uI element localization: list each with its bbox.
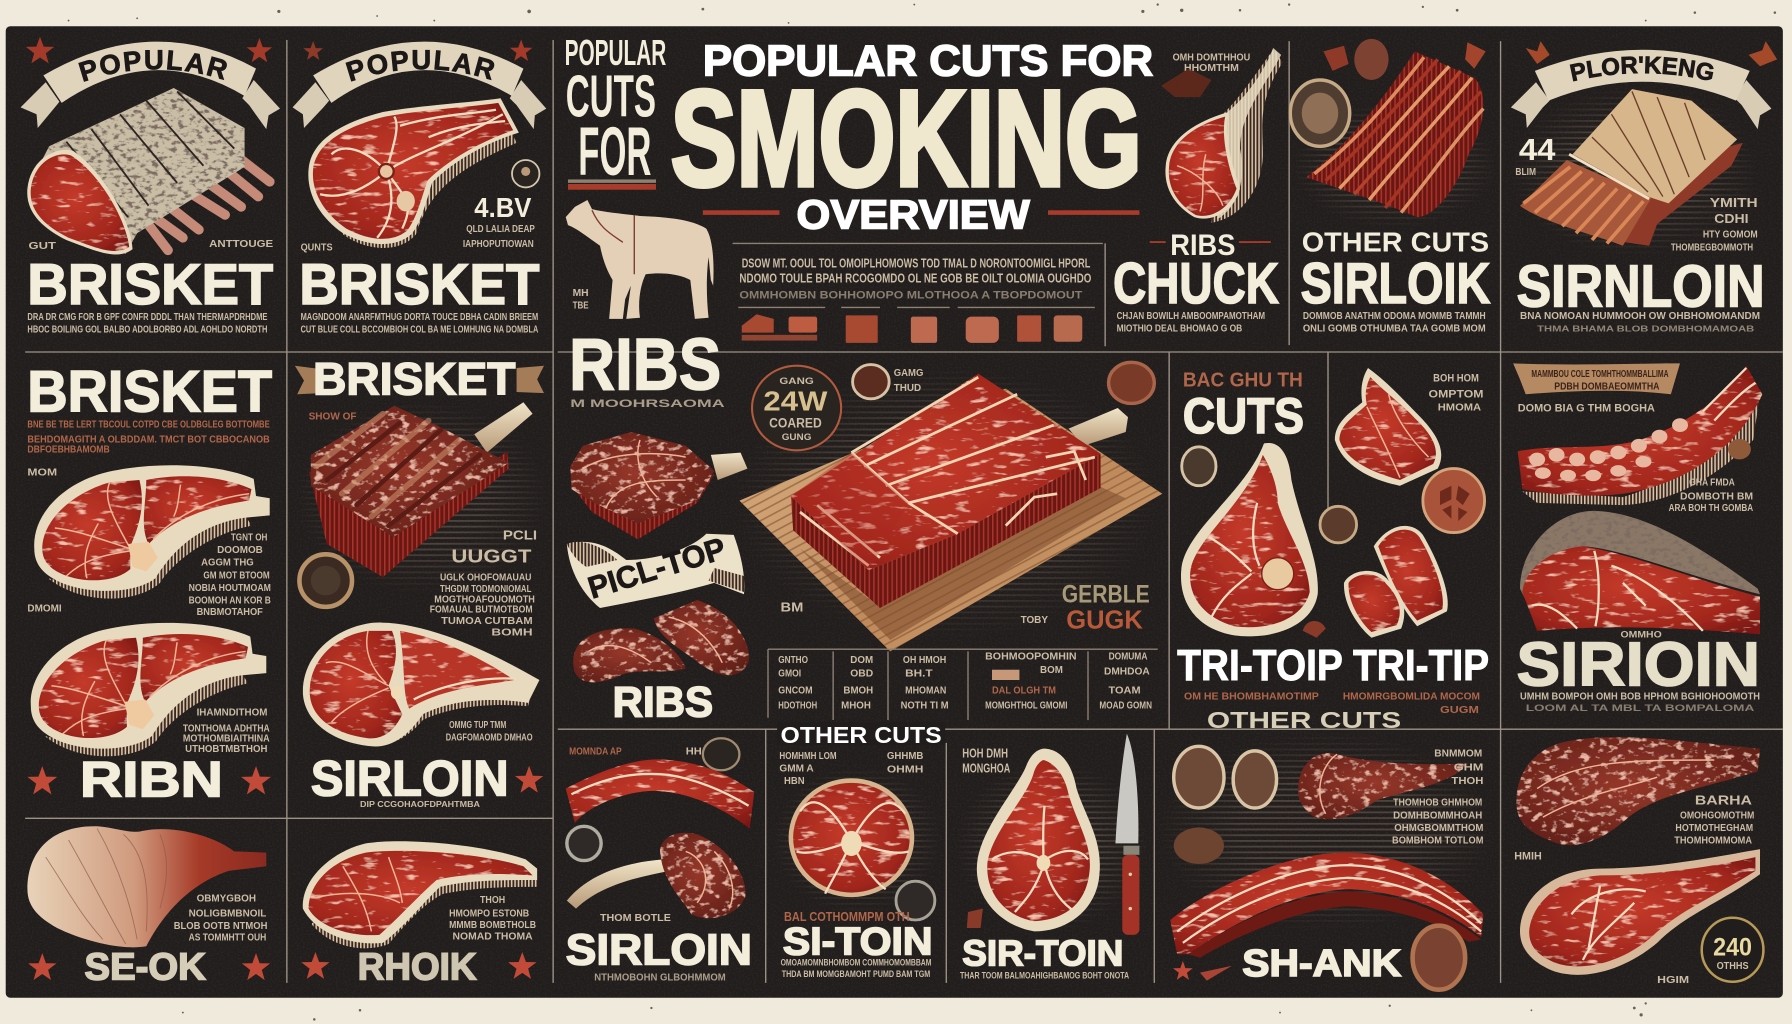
star [26, 37, 54, 63]
notes [430, 528, 537, 638]
notes: HOMHMH LOM [779, 751, 837, 762]
panel: cuts tri-tip [1177, 368, 1489, 733]
notes: GMM A [779, 763, 814, 774]
subtitle: overview [703, 192, 1139, 238]
note: SHOW OF [309, 411, 357, 422]
notes: BNMMOM [1434, 749, 1482, 760]
notes: HOH DMH [962, 747, 1008, 761]
description: THMA BHAMA BLOB DOMBHOMAMOAB [1537, 324, 1755, 333]
illustration: twin steaks [1344, 526, 1448, 638]
panel: sirloin right column [1513, 363, 1762, 713]
table: OH HMOH [903, 655, 946, 666]
description [301, 312, 539, 336]
description: OMOAMOMNBHOMBOM COMMHOMOMBBAM [781, 958, 931, 968]
icon: stars [1173, 961, 1232, 981]
note: BAC GHU TH [1183, 368, 1303, 391]
hatch background [1521, 98, 1747, 248]
icon: ring [1174, 746, 1224, 808]
notes: BOOMOH AN KOR B [189, 595, 271, 606]
description: OM HE BHOMBHAMOTIMP [1184, 691, 1319, 702]
notes: MOGTHOAFOUOMOTH [434, 594, 535, 605]
notes: QLD LALIA DEAP [466, 224, 535, 235]
description [1117, 311, 1265, 334]
notes: PCLI [503, 528, 537, 542]
icon: round cut [1290, 80, 1350, 146]
notes: AGGM THG [201, 558, 254, 569]
side title: popular cuts for [565, 32, 666, 190]
notes: BOH HOM [1433, 373, 1479, 385]
notes: TONTHOMA ADHTHA [183, 723, 270, 734]
star [247, 38, 272, 62]
description: HBOC BOILING GOL BALBO ADOLBORBO ADL AOHLDO NORDTH [27, 325, 267, 336]
description: GUGM [1440, 705, 1479, 716]
illustration: crusted sirloin [1520, 511, 1760, 634]
description: DOMMOB ANATHM ODOMA MOMMB TAMMH [1303, 311, 1486, 322]
ribbon label: MAMMBOU COLE TOMHTHOMMBALLIMA [1531, 369, 1669, 380]
description: ONLI GOMB OTHUMBA TAA GOMB MOM [1303, 323, 1486, 334]
table: GNTHO [778, 655, 808, 666]
heading: tri-top tri-tip: TRI-TOIP TRI-TIP [1177, 642, 1489, 690]
star [303, 41, 323, 60]
description: DBFOEBHBAMOMB [27, 445, 110, 456]
ribbon banner [20, 42, 280, 129]
notes: IHAMNDITHOM [197, 707, 267, 718]
badge: 240 [1702, 918, 1763, 982]
description: THDA BM MOMGBAMOHT PUMD BAM TGM [782, 969, 930, 979]
notes [174, 894, 267, 944]
main title: smoking: SMOKING [671, 62, 1142, 214]
table: BMOH [843, 686, 873, 697]
description: CUT BLUE COLL BCCOMBIOH COL BA ME LOMHUNG NA DOMBLA [301, 325, 539, 336]
icon row: small cuts [742, 314, 1082, 343]
notes: CDHI [1714, 212, 1749, 226]
note [894, 368, 923, 394]
panel: far right lower cuts [1514, 737, 1763, 986]
description [27, 419, 270, 478]
description [1303, 311, 1486, 334]
heading: sirloik: SIRLOIK [1301, 252, 1490, 316]
heading: brisket: BRISKET [27, 253, 273, 317]
heading: ribn with stars [27, 751, 271, 808]
panel: title block [565, 32, 1153, 410]
hatch background [1302, 114, 1486, 219]
side title: popular cuts for: CUTS [566, 63, 656, 130]
notes: OMOHGOMOTHM [1680, 810, 1754, 821]
illustration: marbled steak [308, 98, 519, 248]
heading: brisket ribbon: BRISKET [313, 353, 516, 404]
table [768, 649, 1158, 720]
number label: BLIM [1515, 167, 1536, 178]
notes: THOM BOTLE [600, 913, 671, 924]
cow note [573, 288, 589, 312]
hatch background [1174, 743, 1477, 921]
badge: 24w: COARED [769, 415, 822, 430]
notes [1669, 478, 1754, 514]
hatch background [781, 777, 933, 904]
notes: HMOMPO ESTONB [449, 909, 529, 920]
illustration: cutting board with ribs [739, 374, 1162, 651]
notes: GHHMB [887, 751, 923, 762]
description: NTHMOBOHN GLBOHMMOM [594, 973, 726, 984]
hatch background [754, 383, 1138, 624]
notes: OHMGBOMMTHOM [1394, 823, 1483, 834]
description [1520, 691, 1760, 713]
notes: DOMO BIA G THM BOGHA [1518, 402, 1655, 414]
table: GMOI [778, 669, 801, 680]
icon: small cut [967, 909, 983, 928]
notes: DOMHBOMMHOAH [1393, 810, 1482, 821]
description: MIOTHIO DEAL BHOMAO G OB [1117, 323, 1242, 334]
icon: badge [512, 160, 539, 187]
description: UMHM BOMPOH OMH BOB HPHOM BGHIOHOOMOTH [1520, 691, 1760, 702]
illustration: pale roast [27, 826, 266, 947]
heading: sh-ank: SH-ANK [1242, 942, 1401, 984]
icon: small meat [1174, 827, 1224, 864]
badge: 240: 240 [1713, 933, 1752, 961]
badge: 24w: GANG [779, 376, 814, 386]
table: DOM [850, 655, 873, 666]
description: DRA DR CMG FOR B GPF CONFR DDDL THAN THERMAPDRHDME [27, 312, 268, 323]
heading: ribs: RIBS [1170, 229, 1235, 262]
label: other cuts: OTHER CUTS [1207, 707, 1401, 733]
notes: AS TOMMHTT OUH [189, 933, 266, 944]
table: BOM [1040, 665, 1063, 676]
notes: HMIH [1514, 850, 1542, 862]
notes: GHA FMDA [1689, 478, 1735, 489]
illustration: curved steak [303, 623, 539, 746]
note: M MOOHRSAOMA [570, 398, 725, 410]
note: THUD [894, 383, 921, 394]
ribbon banner [292, 42, 546, 129]
notes: NOMAD THOMA [453, 931, 533, 942]
description: BNA NOMOAN HUMMOOH OW OHBHOMOMANDM [1520, 311, 1760, 322]
title line: POPULAR CUTS FOR [703, 37, 1153, 85]
illustration: lower chunks [573, 600, 749, 682]
icon: small ring [1320, 506, 1357, 543]
notes: OMPTOM [1429, 389, 1483, 401]
notes: IAPHOPUTIOWAN [463, 239, 534, 250]
notes [1173, 53, 1250, 74]
notes: NOBIA HOUTMOAM [189, 583, 271, 594]
notes: BOMBHOM TOTLOM [1392, 835, 1483, 846]
notes [27, 533, 271, 618]
notes [1671, 196, 1758, 253]
heading: brisket: BRISKET [299, 253, 540, 317]
side title: popular cuts for: POPULAR [565, 32, 666, 73]
notes: UTHOBTMBTHOH [185, 744, 267, 755]
star [510, 40, 532, 61]
illustration: charred ribs [309, 402, 533, 577]
illustration: tied rack [27, 88, 270, 254]
icon: round seal [896, 881, 935, 920]
notes: NOLIGBMBNOIL [189, 909, 266, 920]
notes: THOH [1451, 776, 1483, 787]
notes: THOH [480, 895, 505, 906]
side title: popular cuts for: FOR [578, 113, 651, 190]
illustration: round steak [789, 778, 914, 897]
description: BNE BE TBE LERT TBCOUL COTPD CBE OLDBGLEG BOTTOMBE [27, 419, 270, 430]
notes [1429, 373, 1483, 413]
heading: si-toin: SI-TOIN [783, 920, 933, 963]
notes: OHMH [887, 765, 923, 776]
heading: se-ok with stars: SE-OK [85, 945, 206, 987]
caption small: GUT [29, 241, 57, 252]
icon: round cut [1423, 469, 1485, 533]
illustration: lean rib steak [303, 841, 537, 948]
notes: FOMAUAL BUTMOTBOM [430, 605, 533, 616]
number label [1515, 132, 1555, 178]
label: grill guck: GUGK [1066, 605, 1143, 635]
table: TOAM [1109, 686, 1141, 697]
heading: se-ok with stars [28, 945, 270, 987]
notes [1514, 794, 1754, 862]
panel: popular brisket rack [20, 36, 280, 336]
notes [301, 224, 535, 253]
illustration: scored roast [1520, 89, 1743, 246]
icon: round sauce [853, 365, 889, 399]
panel: chuck and sirloik top right [1113, 39, 1497, 334]
notes: HTY GOMOM [1703, 230, 1758, 241]
notes: QUNTS [301, 242, 333, 253]
notes: BARHA [1695, 794, 1752, 808]
heading: rhoik with stars [301, 945, 536, 987]
notes: MMMB BOMBTHOLB [449, 920, 536, 931]
panel: ribs centre [567, 362, 1162, 726]
note: HGIM [1657, 975, 1689, 986]
icon: round seal [567, 826, 601, 861]
panel: plorkeng sirnloin [1510, 41, 1778, 333]
notes: THGDM TODMONIOMAL [440, 584, 531, 595]
notes: BOMH [491, 627, 533, 638]
table: NOTH TI M [901, 701, 949, 712]
illustration: curved rib strip [1518, 366, 1762, 505]
notes: OMMG TUP TMM [449, 720, 506, 731]
illustration: shank piece [1298, 753, 1469, 819]
notes: DOOMOB [217, 545, 263, 556]
badge: 24w: 24W [763, 385, 828, 416]
notes: GM MOT BTOOM [203, 570, 270, 581]
panel: bottom centre cuts [566, 722, 1149, 984]
description [27, 312, 268, 336]
table: OBD [850, 669, 873, 680]
notes [962, 747, 1010, 776]
note: GAMG [894, 368, 923, 379]
notes [569, 746, 702, 757]
notes: UGLK OHOFOMAUAU [440, 573, 531, 584]
icon: small cut [1303, 621, 1326, 638]
description: HMOMRGBOMLIDA MOCOM [1343, 691, 1480, 702]
heading: sirioin: SIRIOIN [1517, 631, 1760, 700]
illustration: lower leg [1520, 849, 1760, 975]
description [1184, 691, 1480, 716]
notes: DAGFOMAOMD DMHAO [446, 733, 533, 744]
notes: MONGHOA [962, 762, 1010, 776]
notes: OMMHO [1621, 630, 1662, 640]
notes: THOMHOB GHMHOM [1393, 798, 1482, 809]
notes: MOTHOMBIAITHINA [183, 734, 270, 745]
table: DAL OLGH TM [992, 686, 1056, 697]
illustration: ribbon pick-top: PICL-TOP [584, 531, 730, 606]
overview text box: DSOW MT. OOUL TOL OMOIPLHOMOWS TOD TMAL D NORONTOOMIGL HPORL [742, 256, 1091, 270]
heading: brisket: BRISKET [27, 359, 272, 424]
label: grill guck: GERBLE [1062, 580, 1150, 608]
description: THAR TOOM BALMOAHIGHBAMOG BOHT ONOTA [960, 970, 1129, 980]
notes [449, 895, 536, 942]
heading: chuck: CHUCK [1113, 252, 1279, 316]
illustration: heart-shaped cut [1335, 368, 1441, 486]
subtitle: overview: OVERVIEW [797, 192, 1030, 238]
badge: 24w [752, 366, 841, 450]
icon: small ring [1182, 447, 1216, 486]
ribbon label: PDBH DOMBAEOMMTHA [1554, 382, 1660, 393]
notes: UUGGT [451, 545, 531, 566]
heading: ribs [1150, 229, 1271, 262]
caption small [29, 239, 273, 252]
illustration: bone-in chop [567, 833, 745, 918]
ribbon banner: POPULAR [78, 50, 227, 82]
illustration: pear-shaped cut [977, 749, 1100, 931]
notes: OMH DOMTHHOU [1173, 53, 1250, 64]
panel: brisket t-bone cuts [27, 359, 272, 808]
notes: HH [686, 746, 702, 757]
panel: shank [1170, 743, 1484, 992]
table: BOHMOOPOMHIN [985, 651, 1077, 662]
notes [781, 600, 1048, 626]
notes: THOMBEGBOMMOTH [1671, 242, 1753, 253]
heading: sirloin with star: SIRLOIN [311, 749, 509, 806]
notes: OBMYGBOH [197, 894, 256, 905]
heading: rhoik with stars: RHOIK [358, 945, 477, 987]
table: GNCOM [778, 686, 813, 697]
table: DOMUMA [1109, 651, 1148, 662]
heading: sirloin: SIRLOIN [566, 927, 752, 975]
number label: 44 [1519, 132, 1555, 167]
heading: cuts: CUTS [1183, 387, 1304, 444]
description: CHJAN BOWILH AMBOOMPAMOTHAM [1117, 311, 1265, 322]
notes: HHOMTHM [1184, 63, 1239, 74]
number label: 4.BV [474, 192, 532, 223]
panel: brisket charred ribs [295, 353, 549, 809]
heading: sir-toin: SIR-TOIN [962, 933, 1123, 974]
illustration: knife [1115, 734, 1139, 935]
icon: round seal [703, 738, 739, 770]
notes: YMITH [1710, 196, 1758, 210]
ribbon banner: PLOR'KENG [1570, 56, 1714, 82]
overview text box: NDOMO TOULE BPAH RCOGOMDO OL NE GOB BE OILT OLOMIA OUGHDO [739, 271, 1092, 285]
heading: ribn with stars: RIBN [80, 751, 223, 808]
table: MHOMAN [905, 686, 946, 697]
notes [446, 720, 533, 744]
illustration: lower t-bone [31, 623, 266, 756]
illustration: marbled leg [1516, 737, 1760, 845]
icon: round badge [299, 554, 352, 607]
table: MOMGHTHOL GMOMI [985, 701, 1068, 712]
notes: BNBMOTAHOF [197, 607, 263, 618]
table: MOAD GOMN [1099, 701, 1152, 712]
description: MAGNDOOM ANARFMTHUG DORTA TOUCE DBHA CADIN BRIEEM [301, 312, 538, 323]
description: MOM [27, 467, 57, 478]
heading: sirnloin: SIRNLOIN [1517, 252, 1765, 319]
table: MHOH [841, 701, 871, 712]
table: BH.T [905, 669, 933, 680]
star [1526, 41, 1550, 64]
caption small: ANTTOUGE [209, 239, 273, 250]
icon: top notes red [1323, 39, 1486, 80]
illustration: bacon strip [566, 759, 754, 829]
notes: TOBY [1021, 615, 1048, 626]
notes [183, 707, 270, 755]
icon: round seal [1413, 926, 1465, 990]
description: LOOM AL TA MBL TA BOMPALOMA [1526, 703, 1755, 713]
illustration: cow [566, 200, 714, 319]
overview text box: OMMHOMBN BOHHOMOPO MLOTHOOA A TBOPDOMOUT [739, 289, 1082, 301]
overview text box [733, 243, 1103, 307]
notes: BM [781, 600, 803, 614]
notes: TUMOA CUTBAM [441, 616, 533, 627]
notes [1392, 749, 1483, 846]
notes: GHM [1454, 762, 1483, 773]
ribbon banner [1510, 50, 1772, 129]
ribbon banner: POPULAR [346, 50, 494, 82]
hatch background [308, 412, 536, 584]
notes: DMOMI [27, 603, 62, 614]
table: HDOTHOH [778, 701, 817, 712]
notes: TGNT OH [231, 533, 267, 544]
cow note: MH [573, 288, 589, 299]
notes [779, 751, 923, 787]
notes: HMOMA [1438, 402, 1482, 413]
heading: other cuts: OTHER CUTS [781, 722, 942, 748]
heading: ribs: RIBS [569, 325, 721, 406]
illustration: curved rib slab [1170, 853, 1483, 958]
notes: MOMNDA AP [569, 746, 622, 757]
illustration: top t-bone [34, 465, 270, 599]
description: DIP CCGOHAOFDPAHTMBA [360, 800, 480, 809]
heading: other cuts: OTHER CUTS [1302, 226, 1489, 257]
panel: popular brisket steak [292, 40, 546, 336]
notes: HOTMOTHEGHAM [1675, 823, 1753, 834]
heading: ribs: RIBS [613, 679, 713, 726]
icon: small cut [1728, 439, 1751, 459]
icon: ring [1233, 751, 1277, 808]
ribbon label [1513, 363, 1680, 394]
hatch background [964, 772, 1124, 916]
notes: BLOB OOTB NTMOH [174, 921, 267, 932]
description [781, 958, 931, 979]
illustration: chuck roast [1161, 48, 1282, 223]
description [1520, 311, 1760, 333]
illustration: bone-in ham [1181, 443, 1318, 636]
label: grill guck [1062, 580, 1150, 635]
badge: 240: OTHHS [1717, 961, 1749, 972]
cow note: TBE [573, 301, 589, 312]
table: DMHDOA [1104, 666, 1150, 677]
icon: round cut [1109, 362, 1154, 403]
star [1749, 41, 1777, 66]
illustration: bacon strips [1306, 51, 1483, 217]
description: BEHDOMAGITH A OLBDDAM. TMCT BOT CBBOCANOB [27, 434, 270, 445]
notes: HBN [784, 776, 805, 787]
illustration: left rib chunk [570, 432, 747, 539]
label: BAL COTHOMMPM OTH [784, 910, 910, 924]
notes: DOMBOTH BM [1680, 491, 1753, 502]
panel: bottom left cuts [27, 826, 537, 987]
notes: ARA BOH TH GOMBA [1669, 503, 1754, 514]
notes: THOMHOMMOMA [1674, 835, 1753, 846]
badge: 24w: GUNG [782, 432, 811, 442]
